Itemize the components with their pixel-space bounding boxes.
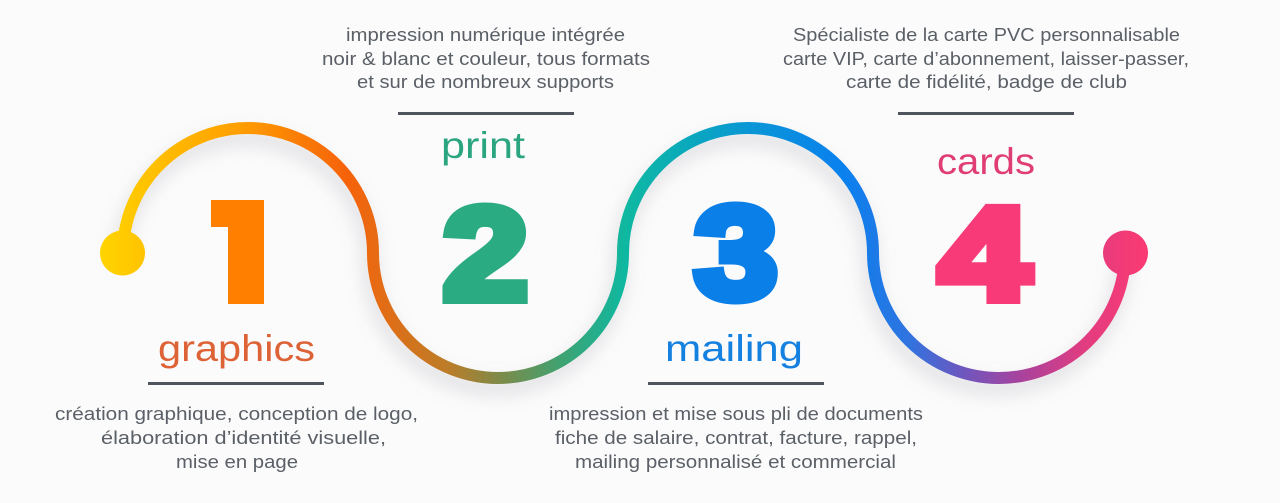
divider line	[398, 112, 574, 115]
description: carte de fidélité, badge de club	[846, 71, 1127, 92]
number 1: 1	[196, 181, 280, 328]
description: mailing personnalisé et commercial	[575, 451, 896, 472]
start dot	[100, 230, 145, 276]
description: création graphique, conception de logo,	[55, 403, 418, 424]
description: carte VIP, carte d’abonnement, laisser-passer,	[783, 48, 1189, 69]
heading cards: cards	[937, 141, 1035, 182]
heading graphics: graphics	[158, 328, 315, 369]
step 1: graphics	[55, 181, 418, 472]
description: et sur de nombreux supports	[357, 71, 614, 92]
step 4: cards	[783, 24, 1189, 327]
description: noir & blanc et couleur, tous formats	[322, 48, 650, 69]
description: mise en page	[176, 451, 298, 472]
divider line	[148, 382, 324, 385]
description	[783, 24, 1189, 92]
heading mailing: mailing	[665, 328, 803, 369]
curve shadow	[120, 138, 1122, 388]
description: impression numérique intégrée	[346, 24, 625, 45]
step 2: print	[322, 24, 650, 327]
description: impression et mise sous pli de documents	[549, 403, 923, 424]
description	[322, 24, 650, 92]
divider line	[898, 112, 1074, 115]
number 2: 2	[443, 180, 528, 327]
number 4: 4	[939, 180, 1030, 327]
description: Spécialiste de la carte PVC personnalisable	[793, 24, 1180, 45]
winding gradient timeline	[100, 128, 1148, 378]
number 3: 3	[694, 179, 778, 326]
description	[549, 403, 923, 472]
step 3: mailing	[549, 179, 923, 472]
heading print: print	[441, 125, 526, 166]
description	[55, 403, 418, 472]
description: fiche de salaire, contrat, facture, rappel,	[555, 427, 917, 448]
end dot	[1103, 230, 1148, 276]
divider line	[648, 382, 824, 385]
description: élaboration d’identité visuelle,	[101, 427, 386, 448]
